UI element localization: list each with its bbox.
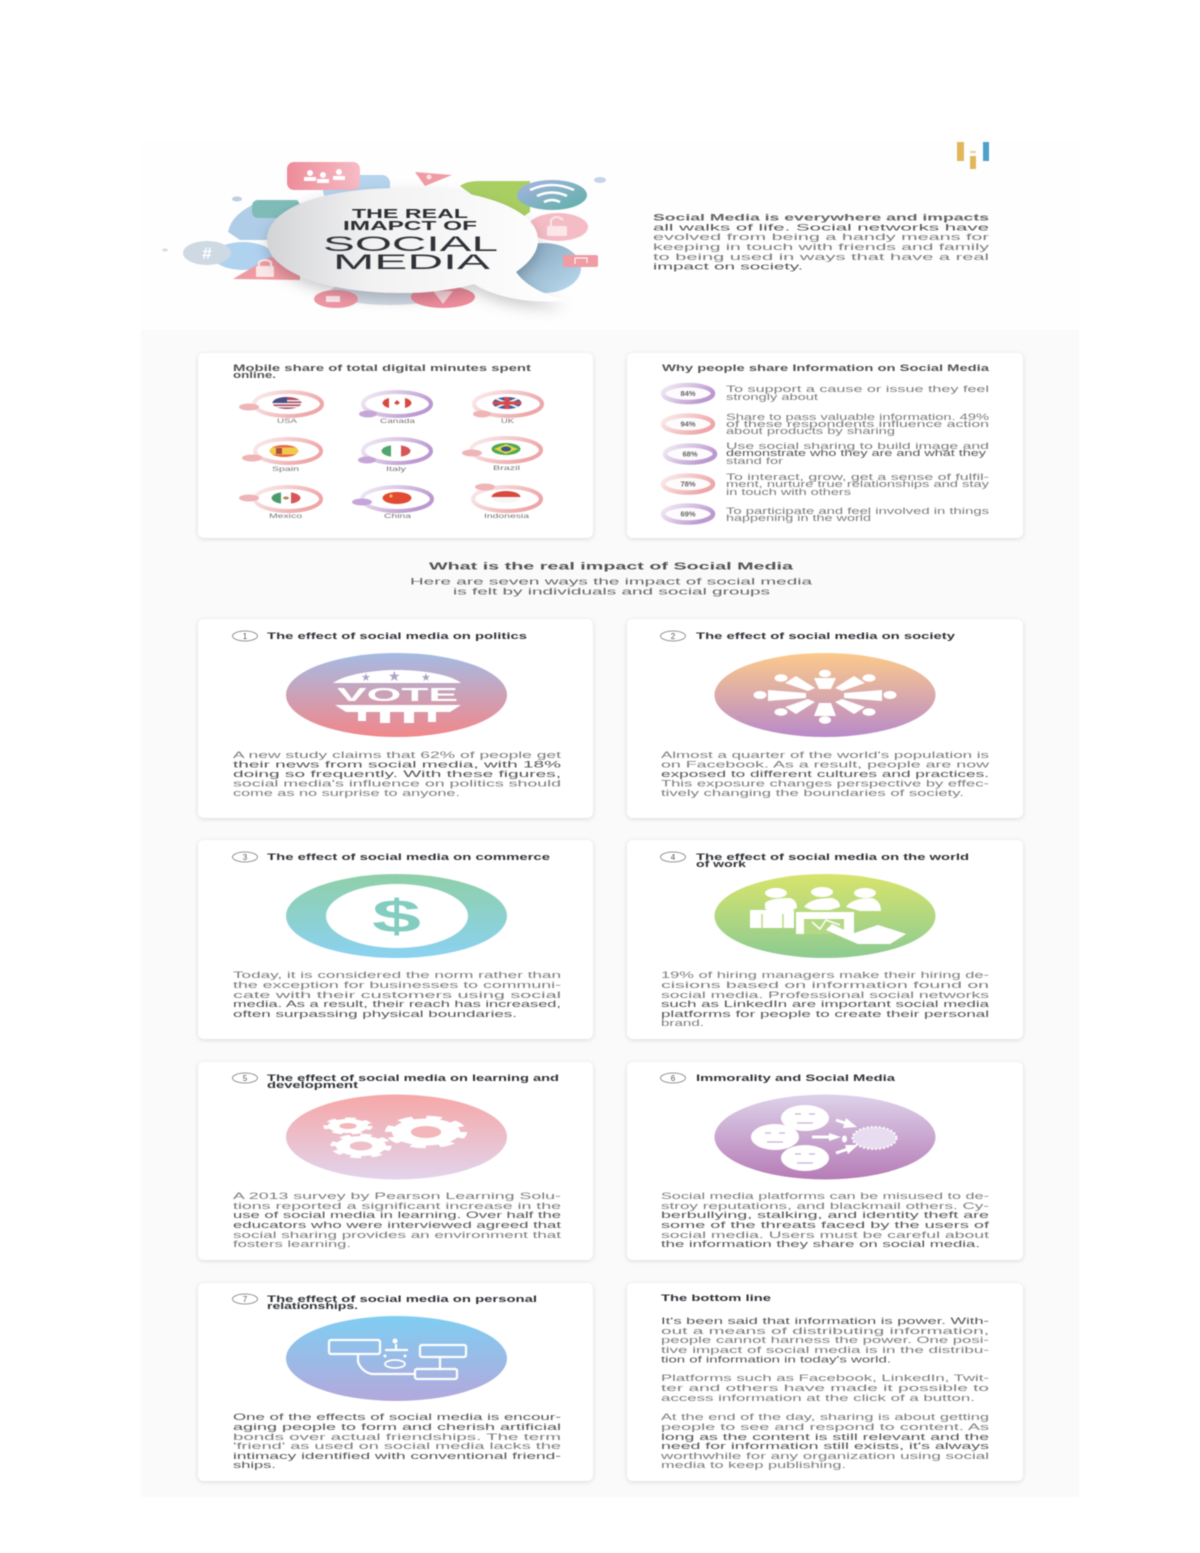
icon: vote: ★ bbox=[361, 672, 371, 684]
heading: immorality bbox=[660, 1073, 896, 1084]
text: learning: tions reported a significant increase in the bbox=[233, 1201, 561, 1212]
hero illustration bbox=[162, 162, 606, 308]
reason 3: demonstrate who they are and what they bbox=[726, 448, 986, 459]
icon: blue tile top bbox=[323, 175, 390, 199]
intro paragraph: all walks of life. Social networks have bbox=[653, 222, 989, 234]
reason 5: 69% bbox=[680, 510, 696, 518]
ring: USA bbox=[239, 392, 322, 425]
text: learning: social sharing provides an environment that bbox=[233, 1230, 562, 1241]
title text: IMAPCT OF bbox=[343, 219, 478, 233]
ring: China: China bbox=[384, 514, 412, 520]
reason 3: Use social sharing to build image and bbox=[726, 441, 989, 452]
text: bottom line para 3: worthwhile for any organization using social bbox=[659, 1451, 989, 1462]
text: society: on Facebook. As a result, people are now bbox=[661, 760, 989, 770]
text: world of work: cisions based on information found on bbox=[661, 980, 989, 991]
heading: relationships: relationships. bbox=[267, 1301, 358, 1312]
reason 4: To interact, grow, get a sense of fulfil- bbox=[726, 472, 989, 483]
text: society: Almost a quarter of the world's population is bbox=[661, 750, 989, 761]
heading: world of work: of work bbox=[696, 859, 747, 870]
ring: Indonesia: Indonesia bbox=[484, 514, 530, 520]
text: society: exposed to different cultures and practices. bbox=[661, 769, 989, 780]
reason 2: of these respondents influence action bbox=[726, 419, 989, 430]
icon: hashtag bbox=[183, 241, 231, 265]
panel: immorality bbox=[627, 1062, 1023, 1260]
heading: mobile share bbox=[233, 363, 532, 381]
text: immorality: stroy reputations, and blackmail others. Cy- bbox=[661, 1201, 989, 1212]
text: commerce: often surpassing physical boundaries. bbox=[233, 1009, 517, 1020]
reason 4: ment, nurture true relationships and stay bbox=[726, 479, 989, 490]
text: bottom line para 1: out a means of distributing information, bbox=[661, 1326, 989, 1337]
logo bbox=[957, 142, 989, 169]
ring: UK: UK bbox=[501, 419, 514, 425]
icon: megaphone bbox=[314, 290, 358, 308]
heading: mobile share: online. bbox=[233, 370, 276, 381]
heading: commerce: 3 bbox=[243, 853, 248, 862]
text: world of work bbox=[661, 970, 990, 1029]
text: immorality: berbullying, stalking, and identity theft are bbox=[661, 1210, 989, 1221]
panel: mobile share bbox=[198, 353, 593, 538]
icon: blue circle right bbox=[507, 243, 581, 293]
ring: Italy bbox=[358, 439, 431, 473]
reason 2: about products by sharing bbox=[726, 426, 895, 437]
reason 2: 94% bbox=[680, 420, 696, 428]
ring: Indonesia bbox=[473, 484, 541, 520]
icon: chat bbox=[286, 1316, 507, 1401]
reason 1: strongly about bbox=[726, 392, 819, 403]
text: politics bbox=[233, 750, 562, 799]
ring: Brazil: Brazil bbox=[493, 466, 520, 472]
text: bottom line para 3: At the end of the day, sharing is about getting bbox=[661, 1412, 989, 1423]
ring: Italy: Italy bbox=[386, 467, 406, 473]
icon: dollar bbox=[286, 874, 507, 958]
text: society: tively changing the boundaries of society. bbox=[661, 788, 964, 799]
text: politics: social media's influence on politics should bbox=[233, 778, 561, 790]
text: commerce: cate with their customers using social bbox=[233, 990, 561, 1001]
reason 4 bbox=[663, 472, 989, 498]
heading: commerce bbox=[232, 852, 550, 863]
text: bottom line para 1: people cannot harness the power. One posi- bbox=[661, 1335, 989, 1346]
text: relationships bbox=[233, 1412, 561, 1471]
heading: society: 2 bbox=[671, 632, 676, 641]
icon: blue tile left bbox=[228, 200, 300, 240]
heading: immorality: Immorality and Social Media bbox=[696, 1073, 896, 1084]
text: world of work: such as LinkedIn are important social media bbox=[661, 999, 990, 1010]
heading: world of work: The effect of social media on the world bbox=[696, 852, 969, 863]
text: bottom line para 1: tive impact of social media is in the distribu- bbox=[661, 1345, 989, 1356]
ring: Mexico bbox=[239, 487, 321, 520]
ring: China bbox=[352, 487, 432, 520]
ring: Canada: Canada bbox=[380, 419, 416, 425]
text: world of work: social media. Professional social networks bbox=[661, 990, 989, 1001]
reason 5: happening in the world bbox=[726, 513, 871, 524]
heading: world of work bbox=[660, 852, 969, 870]
icon: vote: ★ bbox=[421, 672, 431, 684]
icon: gears bbox=[286, 1094, 507, 1180]
section heading: Here are seven ways the impact of social media bbox=[410, 576, 813, 588]
heading: politics: 1 bbox=[243, 632, 248, 641]
icon: vote: ★ bbox=[388, 668, 401, 684]
reason 3: stand for bbox=[726, 456, 783, 467]
text: immorality: social media. Users must be careful about bbox=[661, 1230, 990, 1241]
reason 5: To participate and feel involved in things bbox=[726, 506, 989, 517]
text: bottom line para 2 bbox=[661, 1373, 989, 1404]
panel: learning bbox=[198, 1062, 593, 1260]
text: commerce: Today, it is considered the norm rather than bbox=[233, 970, 561, 981]
text: relationships: ships. bbox=[233, 1460, 276, 1471]
text: bottom line para 2: access information at the click of a button. bbox=[661, 1393, 975, 1404]
text: bottom line para 3: long as the content is still relevant and the bbox=[661, 1432, 989, 1443]
text: relationships: One of the effects of social media is encour- bbox=[233, 1412, 561, 1423]
text: politics: their news from social media, with 18% bbox=[233, 760, 562, 770]
panel: why people share bbox=[627, 353, 1023, 538]
heading: immorality: 6 bbox=[671, 1074, 676, 1083]
panel: bottom line bbox=[627, 1283, 1023, 1481]
text: world of work: brand. bbox=[661, 1018, 704, 1029]
icon: grey ellipse bottom bbox=[330, 279, 450, 305]
title text bbox=[323, 207, 498, 274]
text: bottom line para 1: tion of information in today's world. bbox=[661, 1354, 891, 1366]
text: immorality bbox=[661, 1191, 990, 1250]
heading: commerce: The effect of social media on commerce bbox=[267, 852, 550, 863]
panel: politics bbox=[198, 619, 593, 818]
heading: relationships: The effect of social media on personal bbox=[267, 1294, 537, 1305]
heading: bottom line: The bottom line bbox=[661, 1293, 771, 1304]
ring: Brazil bbox=[462, 438, 541, 472]
text: society bbox=[661, 750, 989, 799]
text: world of work: 19% of hiring managers make their hiring de- bbox=[661, 970, 989, 981]
text: learning: A 2013 survey by Pearson Learning Solu- bbox=[233, 1191, 561, 1202]
icon: people circle bbox=[714, 653, 936, 737]
heading: society bbox=[660, 631, 956, 642]
heading: politics: The effect of social media on politics bbox=[267, 631, 527, 642]
intro paragraph: impact on society. bbox=[653, 262, 803, 272]
icon: dollar: $ bbox=[372, 890, 421, 942]
icon: teal tile bbox=[252, 200, 300, 218]
text: learning: educators who were interviewed agreed that bbox=[233, 1220, 562, 1231]
text: relationships: aging people to form and cherish artificial bbox=[233, 1422, 561, 1433]
text: bottom line para 3 bbox=[659, 1412, 989, 1471]
text: immorality: some of the threats faced by the users of bbox=[661, 1220, 990, 1231]
intro paragraph: to being used in ways that have a real bbox=[653, 252, 989, 263]
reason 4: in touch with others bbox=[726, 487, 851, 498]
background panel bbox=[141, 141, 1079, 1497]
reason 3: 68% bbox=[682, 450, 698, 458]
icon: hashtag: # bbox=[202, 244, 212, 263]
section heading: What is the real impact of Social Media bbox=[429, 562, 794, 572]
intro paragraph: Social Media is everywhere and impacts bbox=[653, 212, 989, 224]
panel: commerce bbox=[198, 840, 593, 1039]
heading: world of work: 4 bbox=[671, 853, 676, 862]
text: relationships: 'friend' as used on social media lacks the bbox=[233, 1441, 561, 1452]
panel: society bbox=[627, 619, 1023, 818]
text: commerce bbox=[233, 970, 561, 1020]
text: learning bbox=[233, 1191, 562, 1250]
intro paragraph bbox=[653, 212, 989, 272]
reason 1: To support a cause or issue they feel bbox=[726, 384, 989, 395]
reason 3 bbox=[665, 441, 989, 467]
title text: THE REAL bbox=[352, 207, 469, 221]
reason 4: 78% bbox=[680, 480, 696, 488]
heading: politics bbox=[232, 631, 527, 642]
heading: learning: 5 bbox=[243, 1074, 248, 1083]
icon: blue ellipse left bbox=[213, 242, 273, 270]
ring: USA: USA bbox=[277, 419, 297, 425]
reason 1 bbox=[663, 384, 989, 403]
icon: wifi bbox=[517, 180, 587, 210]
panel: relationships bbox=[198, 1283, 593, 1481]
text: learning: use of social media in learning. Over half the bbox=[233, 1210, 561, 1221]
text: bottom line para 3: media to keep publishing. bbox=[661, 1460, 846, 1471]
title text: MEDIA bbox=[333, 251, 490, 274]
intro paragraph: evolved from being a handy means for bbox=[653, 232, 989, 243]
text: bottom line para 2: ter and others have made it possible to bbox=[661, 1383, 989, 1394]
ring: Mexico: Mexico bbox=[269, 514, 303, 520]
icon: lock right bbox=[528, 213, 588, 241]
icon: vote bbox=[286, 653, 507, 737]
heading: mobile share: Mobile share of total digital minutes spent bbox=[233, 363, 532, 374]
reason 5 bbox=[663, 506, 989, 524]
icon: lock left bbox=[233, 257, 300, 280]
heading: learning: The effect of social media on learning and bbox=[267, 1073, 559, 1084]
speech bubble bbox=[267, 188, 567, 301]
text: politics: doing so frequently. With these figures, bbox=[233, 769, 561, 780]
text: learning: fosters learning. bbox=[233, 1239, 351, 1250]
text: immorality: Social media platforms can be misused to de- bbox=[661, 1191, 989, 1202]
text: immorality: the information they share on social media. bbox=[661, 1239, 980, 1250]
icon: people tile bbox=[287, 162, 360, 190]
reason 2 bbox=[663, 412, 990, 437]
title text: SOCIAL bbox=[323, 233, 498, 256]
icon: triangle tag bbox=[415, 172, 452, 186]
icon: hiring people bbox=[714, 874, 936, 958]
heading: society: The effect of social media on society bbox=[696, 631, 956, 642]
heading: learning bbox=[232, 1073, 559, 1091]
icon: vote: VOTE bbox=[337, 685, 458, 705]
text: bottom line para 2: Platforms such as Facebook, LinkedIn, Twit- bbox=[661, 1373, 989, 1384]
heading: relationships: 7 bbox=[243, 1295, 248, 1304]
reason 1: 84% bbox=[680, 389, 696, 398]
section heading bbox=[410, 562, 813, 598]
text: relationships: intimacy identified with conventional friend- bbox=[233, 1451, 561, 1462]
icon: location pin bbox=[411, 286, 475, 308]
icon: faces bbox=[714, 1094, 936, 1180]
text: commerce: the exception for businesses to communi- bbox=[233, 980, 561, 991]
text: politics: A new study claims that 62% of people get bbox=[233, 750, 562, 761]
text: relationships: bonds over actual friendships. The term bbox=[233, 1432, 561, 1443]
text: bottom line para 3: need for information still exists, it's always bbox=[661, 1441, 989, 1452]
text: commerce: media. As a result, their reach has increased, bbox=[233, 999, 561, 1010]
text: bottom line para 1: It's been said that information is power. With- bbox=[661, 1316, 989, 1327]
heading: learning: development bbox=[267, 1080, 359, 1091]
panel: world of work bbox=[627, 840, 1023, 1039]
text: world of work: platforms for people to create their personal bbox=[661, 1009, 989, 1020]
text: society: This exposure changes perspective by effec- bbox=[661, 778, 989, 790]
text: bottom line para 3: people to see and respond to content. As bbox=[661, 1422, 989, 1433]
ring: Spain: Spain bbox=[272, 467, 299, 473]
ring: UK bbox=[473, 392, 542, 425]
text: politics: come as no surprise to anyone. bbox=[233, 788, 460, 799]
section heading: is felt by individuals and social groups bbox=[453, 586, 770, 598]
reason 2: Share to pass valuable information. 49% bbox=[726, 412, 990, 423]
intro paragraph: keeping in touch with friends and family bbox=[653, 242, 989, 253]
ring: Canada bbox=[359, 392, 431, 425]
heading: relationships bbox=[232, 1294, 537, 1312]
ring: Spain bbox=[242, 439, 321, 473]
heading: why people share: Why people share Information on Social Media bbox=[662, 363, 990, 374]
icon: music bbox=[563, 255, 598, 267]
text: bottom line para 1 bbox=[661, 1316, 989, 1366]
icon: green tile bbox=[460, 181, 530, 224]
